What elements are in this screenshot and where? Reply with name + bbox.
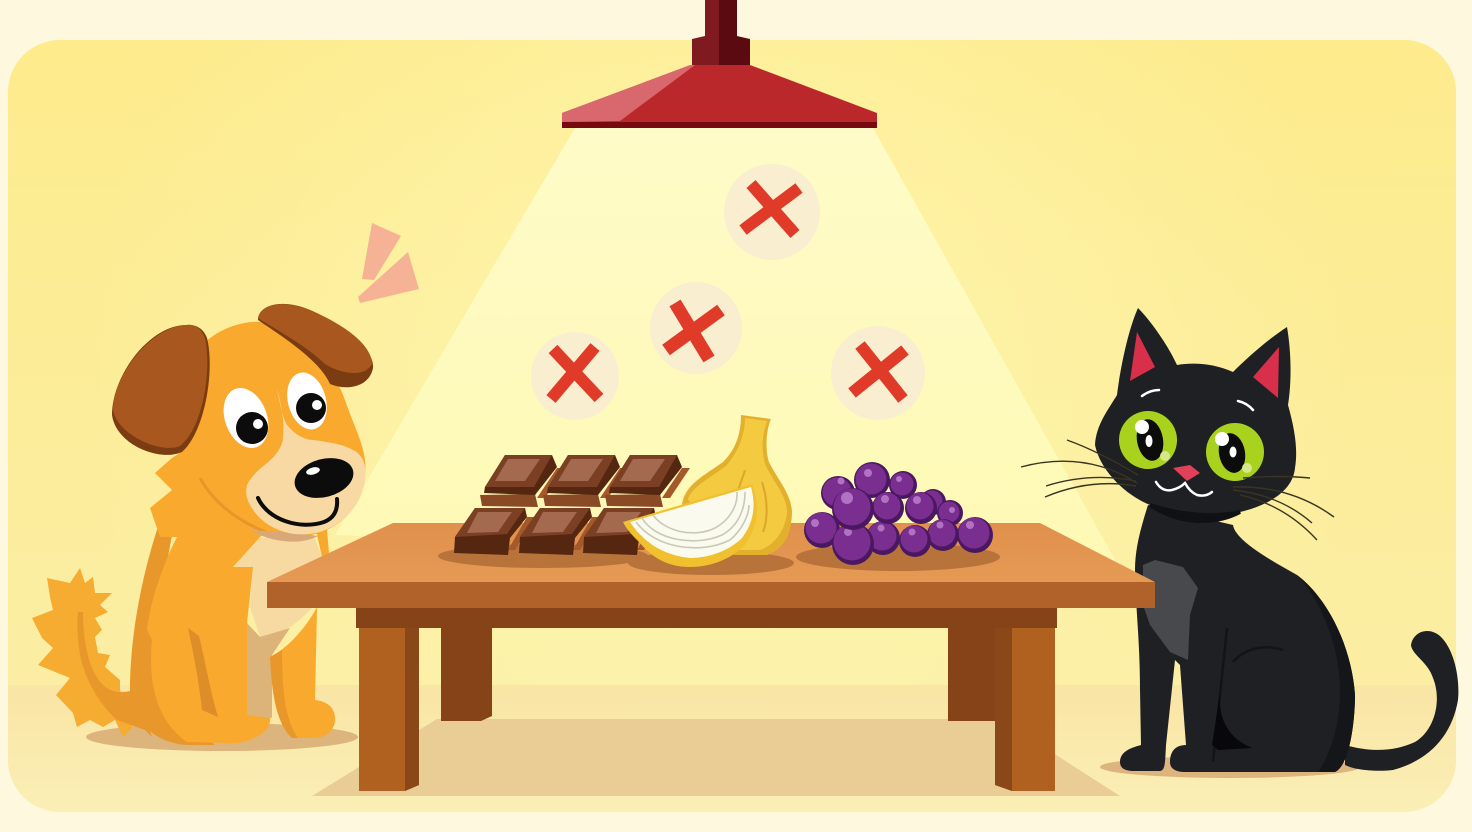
cat whiskers (1021, 440, 1334, 540)
food: grapes (804, 462, 993, 565)
cat body (1120, 505, 1355, 772)
cat eyes (1119, 411, 1177, 469)
icon: warning cross top (724, 164, 820, 260)
icon: warning cross left (531, 332, 619, 420)
dog body back shading (130, 490, 215, 745)
onion wedge (623, 484, 757, 567)
dog muzzle (246, 388, 365, 534)
table front legs (359, 628, 419, 791)
icon: warning cross middle (650, 282, 742, 374)
dog left ear (112, 325, 210, 455)
table back legs (441, 628, 492, 721)
dog leg crease (188, 628, 218, 717)
dog tail (32, 568, 152, 737)
cat head (1095, 308, 1296, 515)
plates (438, 543, 1000, 575)
dog ground shadow (86, 723, 358, 751)
dog nose and smile (290, 452, 358, 504)
dog right ear (258, 304, 373, 387)
onion bulb (682, 415, 792, 555)
table top (267, 523, 1155, 582)
cat chest patch (1143, 560, 1198, 660)
icon: warning cross right (831, 326, 925, 420)
cat (1021, 308, 1458, 778)
food: onion (623, 415, 792, 567)
dog belly (247, 623, 290, 718)
dog (32, 304, 373, 751)
dog chest (233, 534, 322, 637)
cat leg and haunch lines (1213, 628, 1283, 762)
table (267, 523, 1155, 791)
dog head (180, 322, 365, 537)
cat tail (1345, 631, 1458, 771)
cat ears inner (1130, 332, 1155, 381)
cat ground shadow (1100, 756, 1360, 778)
icon: hanging red lamp (562, 0, 877, 128)
dog body (147, 440, 300, 743)
floor shadow under table (312, 719, 1120, 796)
light beam (335, 128, 1118, 565)
cat brows (1142, 390, 1253, 410)
food: chocolate bar (454, 455, 690, 555)
dog eyes (216, 382, 276, 454)
cat nose and mouth (1173, 465, 1200, 481)
icon: dog alert marks (358, 223, 419, 303)
dog hind leg (270, 607, 335, 738)
